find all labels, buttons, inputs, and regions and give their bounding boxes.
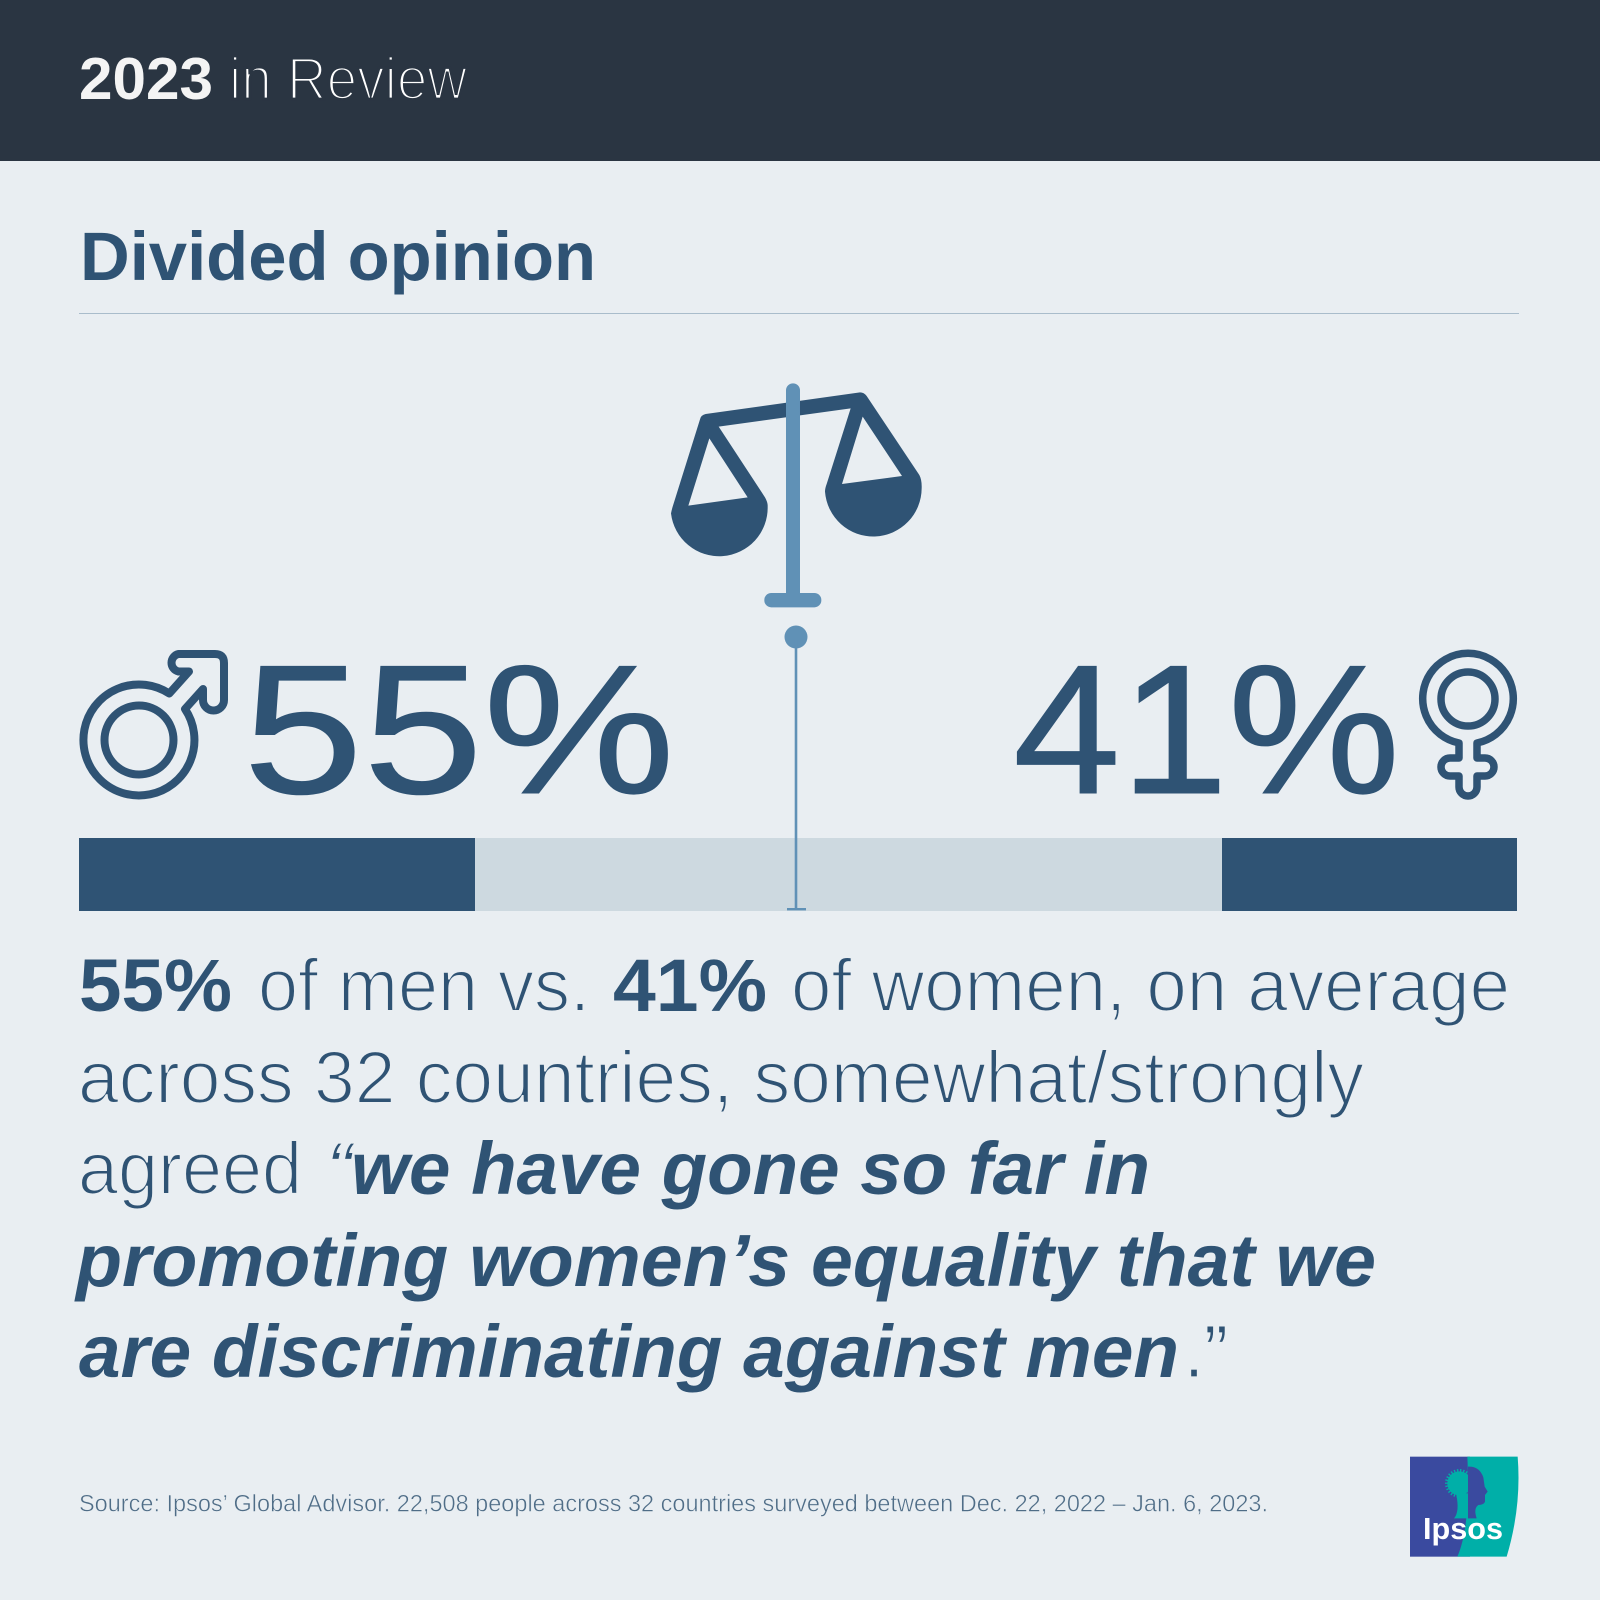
header title: in Review [229, 46, 467, 112]
body text: .” [1184, 1310, 1228, 1393]
body text: are discriminating against men [79, 1310, 1179, 1393]
body text: 55% [79, 944, 232, 1027]
body text: across 32 countries, somewhat/strongly [78, 1036, 1364, 1119]
logo: Ipsos: Ipsos [1423, 1511, 1503, 1546]
heading: Divided opinion: Divided opinion [80, 218, 596, 295]
body text: 41% [613, 944, 767, 1027]
header title: 2023 [79, 46, 213, 112]
body text: we have gone so far in [351, 1127, 1150, 1210]
midpoint marker line [784, 626, 808, 910]
header band [0, 0, 1600, 161]
logo: Ipsos [1410, 1457, 1519, 1557]
stat: 41%: 41% [1013, 626, 1400, 832]
body text [74, 944, 1510, 1393]
source note: Source: Ipsos’ Global Advisor. 22,508 people across 32 countries surveyed between Dec. 22, 2022 – Jan. 6, 2023. [79, 1490, 1268, 1518]
body text: agreed [78, 1127, 302, 1210]
icon: balance scale [671, 383, 922, 607]
body text: “ [326, 1127, 356, 1210]
body text: of men vs. [258, 944, 590, 1027]
stat: 55%: 55% [243, 626, 675, 832]
body text: promoting women’s equality that we [74, 1219, 1376, 1302]
icon: male symbol [83, 654, 224, 795]
body text: of women, on average [791, 944, 1510, 1027]
bar chart: 55% men vs 41% women [79, 838, 1517, 911]
icon: female symbol [1423, 653, 1513, 796]
header title [79, 46, 467, 112]
